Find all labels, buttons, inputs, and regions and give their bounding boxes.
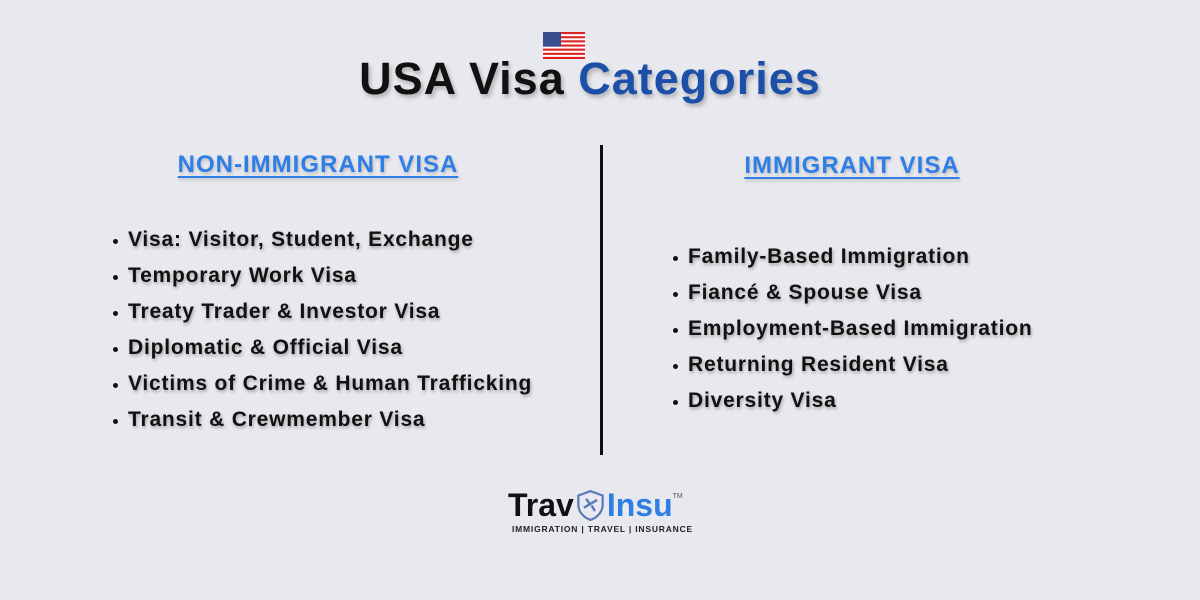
- heading: immigrant visa: IMMIGRANT VISA: [744, 152, 960, 179]
- icon: US flag: [543, 32, 585, 59]
- logo: TravInsu: [508, 486, 693, 534]
- list: non-immigrant visas: Visa: Visitor, Student, Exchange: [128, 228, 474, 251]
- list: non-immigrant visas: Temporary Work Visa: [128, 264, 357, 287]
- list: immigrant visas: Family-Based Immigration: [688, 245, 970, 268]
- list: non-immigrant visas: Treaty Trader & Investor Visa: [128, 300, 440, 323]
- list: immigrant visas: Fiancé & Spouse Visa: [688, 281, 922, 304]
- list: immigrant visas: Employment-Based Immigration: [688, 317, 1032, 340]
- list: non-immigrant visas: Diplomatic & Official Visa: [128, 336, 403, 359]
- title: USA Visa Categories: [359, 53, 821, 104]
- logo: TravInsu: IMMIGRATION | TRAVEL | INSURANCE: [512, 524, 693, 534]
- logo: TravInsu: Trav: [508, 486, 574, 522]
- icon: shield with plane: [577, 490, 604, 521]
- logo: TravInsu: TM: [673, 493, 683, 500]
- list: immigrant visas: Diversity Visa: [688, 389, 837, 412]
- list: immigrant visas: [673, 245, 1034, 415]
- divider: [600, 145, 603, 455]
- list: immigrant visas: Returning Resident Visa: [688, 353, 949, 376]
- list: non-immigrant visas: Victims of Crime & Human Trafficking: [128, 372, 532, 395]
- list: non-immigrant visas: [113, 228, 533, 431]
- logo: TravInsu: Insu: [607, 486, 673, 522]
- list: non-immigrant visas: Transit & Crewmember Visa: [128, 408, 425, 431]
- heading: non-immigrant visa: NON-IMMIGRANT VISA: [178, 151, 458, 178]
